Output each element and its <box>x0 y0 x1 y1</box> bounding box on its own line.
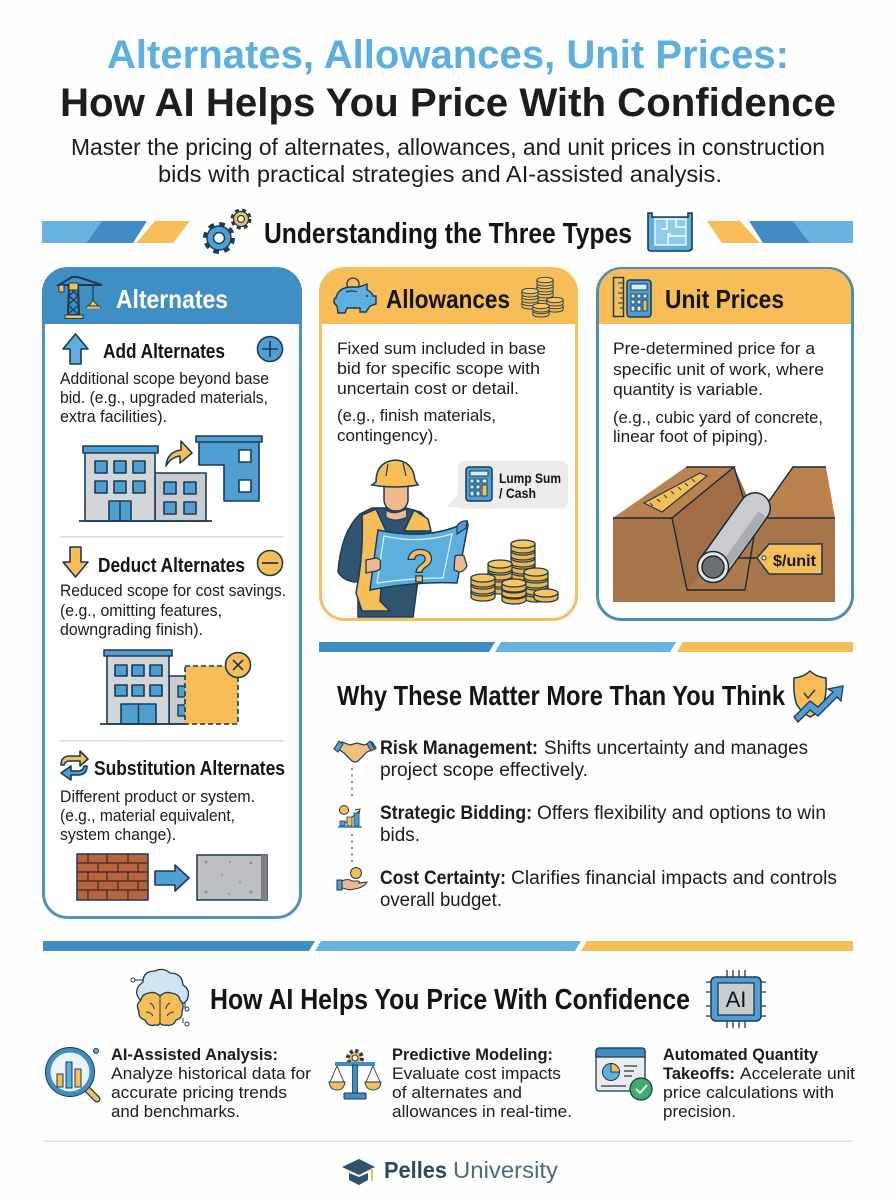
allowances text: uncertain cost or detail. <box>337 379 519 398</box>
feature: automated quantity takeoffs: Automated Quantity <box>663 1046 819 1064</box>
allowances text <box>337 339 546 445</box>
deduct alternates heading: Deduct Alternates <box>98 555 245 577</box>
allowances text: (e.g., finish materials, <box>337 406 496 425</box>
panel: allowances <box>319 268 577 620</box>
allowances text: Fixed sum included in base <box>337 339 546 358</box>
substitution alternates text: Different product or system. <box>60 787 255 806</box>
icon: ruler and calculator <box>614 278 651 317</box>
feature: predictive modeling: Predictive Modeling: <box>392 1046 553 1064</box>
deduct alternates text <box>60 581 286 639</box>
feature: predictive modeling: of alternates and <box>392 1084 522 1102</box>
icon: swap arrows <box>61 751 88 780</box>
allowances text: bid for specific scope with <box>337 359 540 378</box>
list: why these matter <box>334 738 837 911</box>
illustration: concrete panel <box>197 855 267 900</box>
substitution alternates text: (e.g., material equivalent, <box>60 806 235 825</box>
unit prices text: specific unit of work, where <box>613 360 824 379</box>
footer logo: pelles university: Pelles <box>384 1157 447 1183</box>
feature: ai-assisted analysis: Analyze historical data for <box>111 1065 312 1083</box>
allowances heading: Allowances <box>386 284 510 314</box>
deduct alternates text: Reduced scope for cost savings. <box>60 581 286 600</box>
item: cost certainty: Clarifies financial impacts and controls <box>511 868 837 889</box>
deduct alternates <box>60 547 286 724</box>
item: strategic bidding: Strategic Bidding: <box>380 803 532 824</box>
illustration: worker with blueprint <box>338 460 468 617</box>
deduct alternates text: (e.g., omitting features, <box>60 601 222 620</box>
section ribbon: right <box>707 221 853 243</box>
subtitle: bids with practical strategies and AI-assisted analysis. <box>158 161 722 187</box>
icon: graduation cap <box>342 1159 375 1185</box>
feature: ai-assisted analysis: and benchmarks. <box>111 1103 240 1121</box>
callout: lump sum: / Cash <box>499 486 536 501</box>
item: risk management: project scope effectively. <box>380 760 588 781</box>
feature: predictive modeling: allowances in real-time. <box>392 1103 572 1121</box>
icon: down arrow <box>63 547 88 577</box>
add alternates heading: Add Alternates <box>103 341 225 363</box>
icon: brain with cloud <box>131 969 189 1026</box>
alternates heading: Alternates <box>116 284 228 314</box>
feature: automated quantity takeoffs: Accelerate unit <box>740 1065 855 1083</box>
callout: lump sum <box>447 461 568 509</box>
icon: coin stacks <box>522 277 563 317</box>
illustration: brick wall <box>77 854 148 900</box>
icon: ai chip <box>706 970 766 1028</box>
feature: ai-assisted analysis: accurate pricing trends <box>111 1084 287 1102</box>
allowances text: contingency). <box>337 426 438 445</box>
add alternates <box>60 334 282 521</box>
icon: plus <box>258 336 282 362</box>
alternates header <box>42 268 302 324</box>
substitution alternates text: system change). <box>60 825 176 844</box>
illustration: trench with pipe: $/unit <box>773 553 817 570</box>
substitution alternates heading: Substitution Alternates <box>94 758 285 780</box>
item: cost certainty <box>337 868 837 911</box>
heading: why these matter: Why These Matter More Than You Think <box>337 680 785 711</box>
icon: piggy bank <box>334 278 376 313</box>
item: risk management: Shifts uncertainty and manages <box>544 738 808 759</box>
unit prices text: (e.g., cubic yard of concrete, <box>613 408 823 427</box>
substitution alternates text <box>60 787 255 844</box>
add alternates text: bid. (e.g., upgraded materials, <box>60 388 268 407</box>
item: strategic bidding: bids. <box>380 825 420 846</box>
subtitle <box>71 134 825 187</box>
unit prices header <box>599 269 851 324</box>
icon: ai chip: AI <box>726 987 746 1012</box>
ribbon: ai section <box>43 941 853 951</box>
panel: alternates <box>42 268 302 918</box>
icon: crane <box>59 277 102 318</box>
icon: dashboard with check <box>596 1048 652 1100</box>
section ribbon: left <box>42 221 190 243</box>
ribbon: why these matter <box>319 642 853 652</box>
unit prices text: linear foot of piping). <box>613 427 768 446</box>
item: strategic bidding: Offers flexibility and options to win <box>537 803 826 824</box>
icon: blueprint <box>648 213 692 251</box>
feature: predictive modeling <box>329 1046 572 1121</box>
icon: up arrow <box>63 334 88 364</box>
unit prices text: Pre-determined price for a <box>613 339 816 358</box>
unit prices text: quantity is variable. <box>613 380 763 399</box>
allowances header <box>319 268 577 324</box>
item: strategic bidding <box>338 803 826 846</box>
feature: automated quantity takeoffs: price calculations with <box>663 1084 834 1102</box>
icon: shield with growth arrow <box>794 671 843 722</box>
title: How AI Helps You Price With Confidence <box>60 81 836 125</box>
feature: automated quantity takeoffs <box>596 1046 855 1121</box>
illustration: reduced building <box>100 650 250 724</box>
icon: handshake <box>334 741 376 762</box>
item: risk management <box>334 738 808 781</box>
illustration: worker with blueprint: ? <box>406 540 434 592</box>
icon: chart with coin <box>338 806 362 827</box>
callout: lump sum: Lump Sum <box>499 471 561 486</box>
unit prices heading: Unit Prices <box>665 284 784 314</box>
footer logo: pelles university: University <box>453 1157 559 1183</box>
ai features <box>46 1046 855 1121</box>
icon: right arrow <box>155 865 189 891</box>
icon: scales with gear <box>329 1051 381 1099</box>
subtitle: Master the pricing of alternates, allowances, and unit prices in construction <box>71 134 825 160</box>
feature: ai-assisted analysis <box>46 1046 312 1121</box>
heading: understanding the three types: Understanding the Three Types <box>264 218 632 250</box>
feature: ai-assisted analysis: AI-Assisted Analysis: <box>111 1046 278 1064</box>
item: cost certainty: overall budget. <box>380 890 502 911</box>
icon: magnifier with chart <box>46 1048 98 1099</box>
illustration: building addition <box>79 436 262 521</box>
item: risk management: Risk Management: <box>380 738 538 759</box>
feature: automated quantity takeoffs: Takeoffs: <box>663 1065 735 1083</box>
deduct alternates text: downgrading finish). <box>60 620 203 639</box>
feature: predictive modeling: Evaluate cost impacts <box>392 1065 561 1083</box>
add alternates text: Additional scope beyond base <box>60 369 269 388</box>
illustration: trench with pipe <box>613 467 835 602</box>
icon: gears <box>206 211 249 250</box>
add alternates text <box>60 369 269 426</box>
unit prices text <box>613 339 824 446</box>
title <box>60 33 836 125</box>
footer logo: pelles university <box>342 1157 559 1185</box>
substitution alternates <box>60 751 285 900</box>
panel: unit prices <box>598 268 852 620</box>
add alternates text: extra facilities). <box>60 407 167 426</box>
feature: automated quantity takeoffs: precision. <box>663 1103 736 1121</box>
item: cost certainty: Cost Certainty: <box>380 868 506 889</box>
heading: how ai helps: How AI Helps You Price With Confidence <box>210 984 690 1016</box>
title: Alternates, Allowances, Unit Prices: <box>107 33 789 77</box>
icon: minus <box>258 550 282 576</box>
icon: hand with coin <box>337 868 367 890</box>
illustration: coin stacks <box>471 540 558 604</box>
